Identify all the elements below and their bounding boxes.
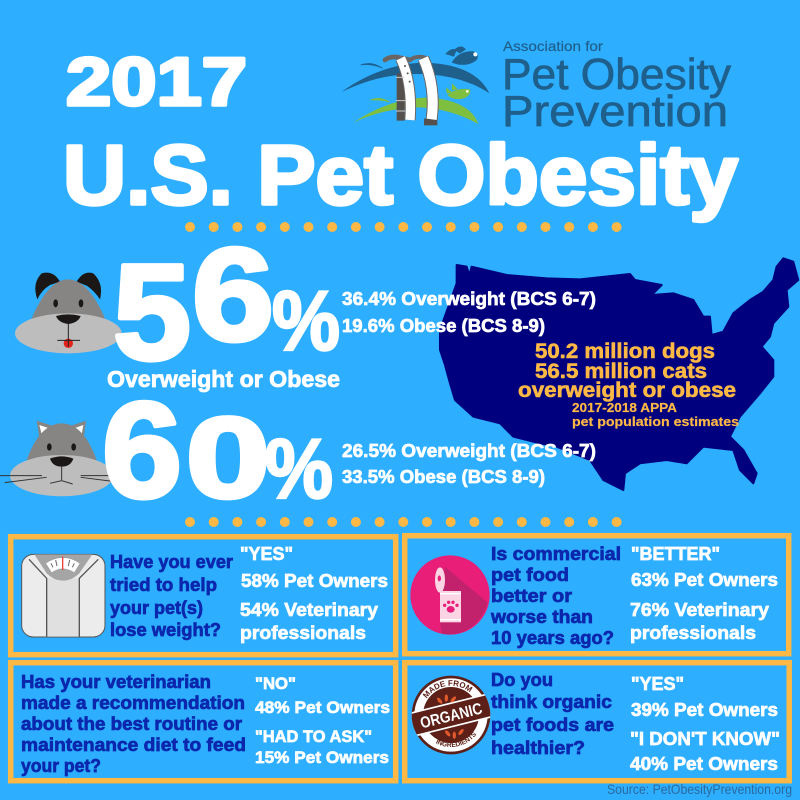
stats: cat breakdown [342, 440, 596, 487]
answers [630, 673, 780, 774]
icon: cat face [0, 421, 123, 496]
question: Is commercial [491, 543, 621, 564]
question: think organic [491, 691, 612, 712]
stat: 60 percent of cats [102, 374, 333, 526]
logo emblem [342, 46, 489, 124]
answers: 40% Pet Owners [630, 753, 778, 774]
answers: 54% Veterinary [240, 599, 379, 620]
panel: help pet lose weight [11, 537, 396, 655]
label: overweight or obese: Overweight or Obese [107, 366, 340, 392]
digit 6: 6 [102, 374, 182, 526]
stat: 56 percent of dogs [113, 221, 340, 388]
question: lose weight? [110, 619, 221, 640]
answers: 58% Pet Owners [241, 570, 388, 591]
logo text: Association for: Association for [503, 38, 603, 54]
answers [630, 543, 778, 643]
question: Have you ever [110, 551, 233, 572]
question: your pet(s) [110, 597, 203, 618]
panel: veterinarian recommendation [11, 663, 396, 781]
answers: professionals [630, 622, 756, 643]
question: worse than [490, 606, 593, 627]
icon: pet food can [410, 555, 490, 635]
digit 0: 0 [186, 395, 270, 522]
answers [255, 674, 390, 767]
question: healthier? [491, 737, 585, 758]
answers: "HAD TO ASK" [255, 727, 372, 746]
dotted divider: top [185, 222, 622, 232]
map of United States [440, 258, 798, 490]
dog overweight: 36.4% Overweight (BCS 6-7) [342, 288, 596, 309]
title: 2017: 2017 [66, 44, 247, 120]
question: maintenance diet to feed [21, 734, 246, 755]
cats count: 56.5 million cats [535, 360, 707, 383]
digit 5: 5 [113, 236, 191, 388]
percent sign: % [265, 422, 333, 516]
source line 1: 2017-2018 APPA [572, 401, 677, 415]
answers: professionals [240, 622, 366, 643]
answers: 39% Pet Owners [631, 699, 778, 720]
icon: weighing scale [22, 554, 105, 637]
answers: 63% Pet Owners [631, 569, 778, 590]
cat obese: 33.5% Obese (BCS 8-9) [342, 466, 545, 487]
question: pet foods are [491, 714, 614, 735]
question: better or [491, 585, 572, 606]
question: tried to help [110, 574, 217, 595]
answers: "YES" [240, 543, 293, 564]
icon: organic badge: INGREDIENTS [436, 732, 476, 747]
question: your pet? [21, 755, 101, 776]
icon: organic badge: MADE FROM [422, 680, 473, 698]
dog obese: 19.6% Obese (BCS 8-9) [342, 315, 545, 336]
answers [240, 543, 388, 643]
source line 2: pet population estimates [572, 415, 739, 429]
question: about the best routine or [21, 713, 242, 734]
cat overweight: 26.5% Overweight (BCS 6-7) [342, 440, 596, 461]
answers: "I DON'T KNOW" [630, 728, 780, 749]
question: made a recommendation [21, 692, 245, 713]
answers: 15% Pet Owners [255, 748, 389, 767]
logo: Association for Pet Obesity Prevention [342, 38, 731, 136]
answers: "YES" [631, 673, 684, 694]
icon: organic badge [412, 676, 490, 754]
logo text: Prevention: Prevention [502, 87, 728, 136]
question: Has your veterinarian [21, 671, 211, 692]
icon: dog face [15, 273, 122, 353]
question: 10 years ago? [491, 627, 614, 648]
dotted divider: bottom [185, 517, 622, 527]
question [491, 669, 614, 758]
answers: "BETTER" [631, 543, 720, 564]
digit 6: 6 [192, 221, 274, 368]
dogs count: 50.2 million dogs [535, 340, 715, 363]
question [490, 543, 621, 648]
panel: commercial pet food [405, 536, 789, 654]
question [110, 551, 233, 640]
logo text: Pet Obesity: Pet Obesity [502, 50, 731, 99]
stats: dog breakdown [342, 288, 596, 336]
answers: 48% Pet Owners [255, 698, 390, 717]
answers: "NO" [255, 674, 296, 693]
map callout: pet population estimates [518, 340, 739, 429]
overweight or obese: overweight or obese [518, 379, 736, 402]
percent sign: % [272, 274, 340, 368]
title: U.S. Pet Obesity: U.S. Pet Obesity [63, 128, 738, 222]
question: pet food [491, 564, 569, 585]
question [21, 671, 246, 776]
icon: organic badge: ORGANIC [419, 700, 485, 732]
question: Do you [491, 669, 553, 690]
answers: 76% Veterinary [630, 599, 770, 620]
panel: organic pet foods [402, 660, 792, 784]
